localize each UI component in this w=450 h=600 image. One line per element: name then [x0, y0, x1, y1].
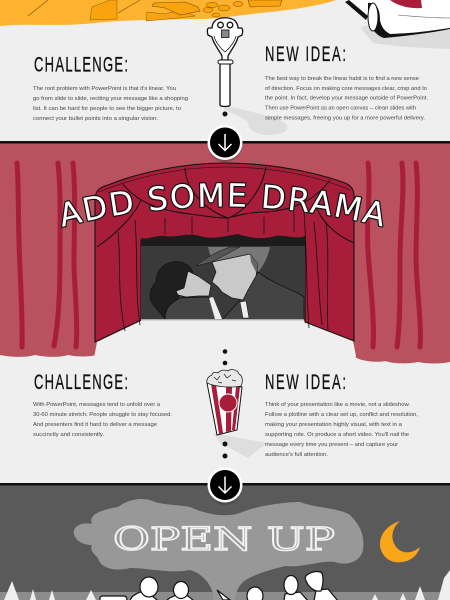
- text block: new idea 2: [265, 402, 418, 458]
- icon: coin binocular viewer: [207, 18, 287, 135]
- dot: [223, 361, 227, 365]
- illustration: tree canopy cloud: [74, 499, 363, 600]
- text block: new idea 1: simple messages, freeing you up for a more powerful delivery.: [265, 116, 425, 122]
- heading: challenge 1: CHALLENGE:: [34, 52, 128, 76]
- woman body: [165, 297, 220, 320]
- title: add some drama: ADD SOME DRAMA: [61, 182, 384, 228]
- text block: new idea 1: of direction. Focus on making core messages clear, crisp and to: [265, 86, 427, 92]
- curtain folds right: [368, 163, 420, 347]
- text block: challenge 1: The root problem with PowerPoint is that it's linear. You: [33, 86, 176, 92]
- woman face: [176, 271, 211, 297]
- text block: new idea 2: audience's full attention.: [265, 452, 328, 458]
- swags: [97, 167, 354, 247]
- panel: orange city banner: [0, 0, 336, 26]
- woman hair: [150, 261, 193, 318]
- title: open up: OPEN UP: [113, 520, 335, 558]
- illustration: group of people: [100, 572, 338, 600]
- tie: [240, 301, 249, 318]
- man hat: [208, 247, 270, 272]
- side curtain folds: [118, 212, 328, 331]
- icon: stage floor: [94, 320, 356, 362]
- text block: challenge 2: succinctly and consistently.: [33, 432, 104, 438]
- heading: challenge 2: CHALLENGE:: [34, 370, 128, 394]
- illustration: pine trees: [4, 570, 450, 600]
- text block: challenge 2: 30-60 minute stretch. People struggle to stay focused.: [33, 412, 172, 418]
- curtain folds left: [17, 163, 77, 347]
- text block: challenge 1: list. It can be hard for people to see the bigger picture, to: [33, 106, 181, 112]
- text block: challenge 2: With PowerPoint, messages tend to unfold over a: [33, 402, 161, 408]
- text block: challenge 1: connect your bullet points into a singular vision.: [33, 116, 158, 122]
- valance: [141, 205, 305, 238]
- dot: [222, 442, 228, 446]
- text block: new idea 2: message every time you present – and capture your: [265, 442, 398, 448]
- text block: new idea 2: making your presentation highly visual, with text in a: [265, 422, 403, 428]
- icon: crescent moon: [380, 521, 420, 562]
- text block: challenge 1: [33, 86, 188, 122]
- icon: arrow button 1: [208, 125, 242, 162]
- text block: new idea 2: Follow a plotline with a clear set up, conflict and resolution,: [265, 412, 418, 418]
- panel: add some drama theatre band: [0, 141, 450, 364]
- illustration: theatre stage: [95, 163, 354, 342]
- text block: new idea 2: Think of your presentation like a movie, not a slideshow.: [265, 402, 410, 408]
- film screen with kissing couple: [141, 233, 305, 320]
- icon: popcorn box: [207, 370, 267, 458]
- man face: [212, 254, 258, 300]
- heading: new idea 1: NEW IDEA:: [265, 42, 346, 66]
- man suit: [222, 272, 304, 320]
- text block: new idea 1: the point. In fact, develop your message outside of PowerPoint.: [265, 96, 428, 102]
- icon: white car: [345, 0, 450, 49]
- text block: challenge 2: And presenters find it hard to deliver a message: [33, 422, 157, 428]
- dot: [223, 349, 227, 354]
- dot: [222, 454, 228, 458]
- heading: new idea 2: NEW IDEA:: [265, 370, 346, 394]
- text block: challenge 2: [33, 402, 172, 438]
- text block: new idea 2: supporting role. Or produce a short video. You'll nail the: [265, 432, 409, 438]
- text block: new idea 1: [265, 76, 428, 122]
- scarf: [209, 297, 222, 319]
- text block: new idea 1: Then use PowerPoint as an open canvas – clean slides with: [265, 106, 416, 112]
- icon: arrow button 2: [208, 468, 242, 505]
- panel: open up night band: [0, 483, 450, 600]
- text block: new idea 1: The best way to break the linear habit is to find a new sense: [265, 76, 419, 82]
- text block: challenge 1: go from slide to slide, reciting your message like a shopping: [33, 96, 188, 102]
